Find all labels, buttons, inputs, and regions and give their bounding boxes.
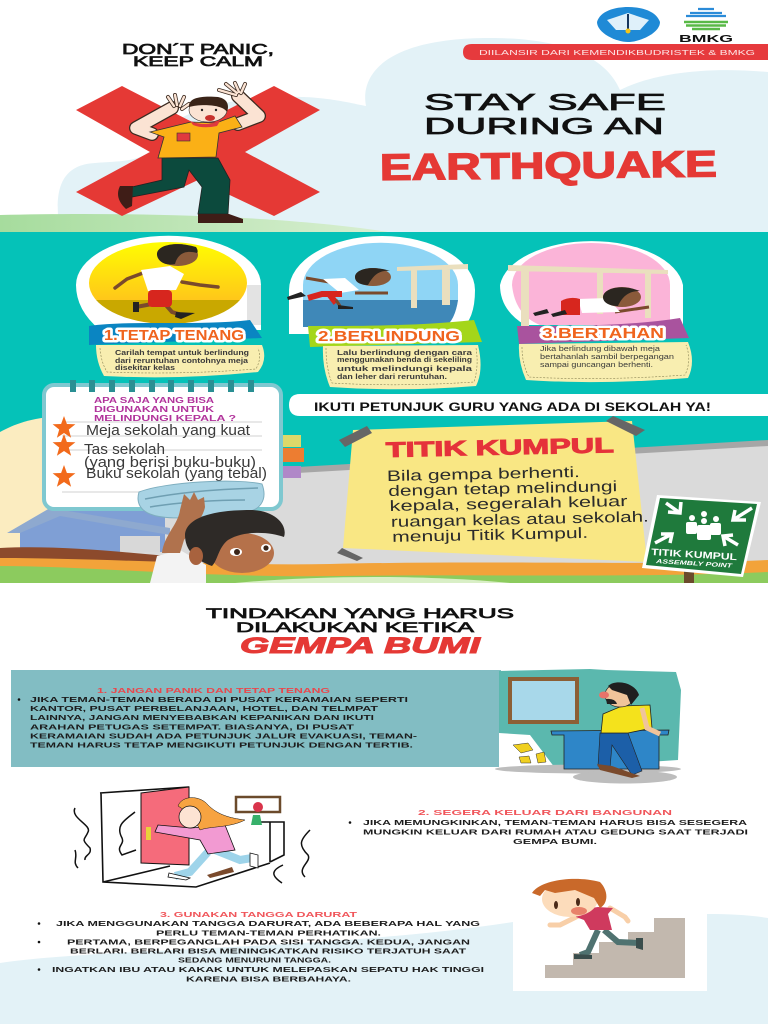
man's shoes bbox=[597, 764, 640, 778]
window bbox=[510, 679, 577, 722]
text: step 3: SEDANG MENURUNI TANGGA. bbox=[178, 958, 331, 964]
step 1: tetap tenang: dari reruntuhan contohnya meja bbox=[115, 358, 248, 365]
man's head bbox=[189, 98, 227, 122]
man's arms bbox=[136, 83, 259, 134]
arch frame 2 bbox=[289, 236, 475, 334]
panel: step 1 text: LAINNYA, JANGAN MENYEBABKAN KEPANIKAN DAN IKUTI bbox=[30, 715, 374, 722]
text: step 2: GEMPA BUMI. bbox=[513, 839, 597, 846]
heading: tindakan yang harus dilakukan ketika gempa bumi: TINDAKAN YANG HARUS bbox=[206, 605, 514, 621]
step 3: bertahan bbox=[500, 240, 692, 382]
girl's hair bbox=[178, 798, 245, 830]
pale hill at left bbox=[0, 416, 60, 560]
illustration: boy on stairs bbox=[513, 879, 707, 991]
text: step 3: KARENA BISA BERBAHAYA. bbox=[186, 976, 351, 984]
room lines bbox=[100, 787, 284, 887]
illustration: man holding cabinet bbox=[495, 669, 681, 784]
broken vase bbox=[513, 743, 546, 763]
logo: Kemendikbud bbox=[597, 7, 660, 42]
notepad: what to use to protect the head: Buku sekolah (yang tebal) bbox=[86, 466, 267, 482]
heading: don't panic: DON´T PANIC, bbox=[122, 42, 274, 58]
running boy 1 bbox=[115, 244, 218, 319]
title: stay safe during an earthquake: DURING AN bbox=[424, 113, 664, 139]
note body: kepala, segeralah keluar bbox=[389, 493, 628, 515]
note body bbox=[387, 463, 649, 546]
icon: red X bbox=[76, 86, 320, 216]
note body: menuju Titik Kumpul. bbox=[392, 525, 588, 546]
banner 3 bbox=[517, 318, 689, 344]
step 3: bertahan: Jika berlindung dibawah meja bbox=[540, 346, 660, 353]
man's shirt bbox=[601, 705, 652, 733]
step 1: tetap tenang bbox=[76, 236, 264, 377]
boy's shirt bbox=[576, 907, 613, 930]
notepad page bbox=[44, 385, 281, 509]
illustration: panicking man bbox=[118, 83, 259, 223]
girl's face bbox=[179, 806, 201, 828]
step 1: tetap tenang: Carilah tempat untuk berlindung bbox=[115, 350, 249, 357]
man's trousers bbox=[598, 733, 642, 775]
illustration: boy with backpack on head bbox=[138, 481, 285, 583]
text: step 2 bbox=[349, 810, 748, 846]
ground bands bbox=[0, 547, 190, 566]
text: step 2: MUNGKIN KELUAR DARI RUMAH ATAU GEDUNG SAAT TERJADI bbox=[363, 830, 748, 836]
step 2: berlindung: Lalu berlindung dengan cara bbox=[337, 350, 472, 357]
text: step 3: 3. GUNAKAN TANGGA DARURAT bbox=[160, 912, 358, 919]
sign: assembly point bbox=[642, 495, 761, 583]
step 3: bertahan: bertahanlah sambil berpegangan bbox=[540, 354, 674, 361]
text: step 3 bbox=[38, 912, 484, 984]
panel: step 1 text bbox=[11, 670, 501, 767]
panel: step 1 text: ARAHAN PETUGAS SETEMPAT. BIASANYA, DI PUSAT bbox=[30, 724, 355, 732]
panel: step 1 text: 1. JANGAN PANIK DAN TETAP TENANG bbox=[97, 688, 331, 695]
note body: ruangan kelas atau sekolah. bbox=[391, 509, 649, 531]
door bbox=[141, 787, 189, 865]
crawling boy 3 bbox=[533, 287, 649, 317]
sign arrows and people bbox=[655, 502, 752, 546]
illustration: girl leaving through door bbox=[74, 787, 310, 887]
note body: Bila gempa berhenti. bbox=[387, 464, 580, 485]
arch frame 1 bbox=[76, 236, 261, 330]
instruction pill bbox=[289, 394, 768, 416]
step 1: tetap tenang: disekitar kelas bbox=[115, 365, 175, 372]
backpack bbox=[138, 481, 264, 518]
boy's arms bbox=[550, 908, 628, 925]
notepad: what to use to protect the head: DIGUNAKAN UNTUK bbox=[94, 405, 214, 414]
crack lines bbox=[74, 808, 310, 883]
note 3 bbox=[519, 342, 692, 382]
scene 3 bbox=[512, 243, 670, 325]
step 2: berlindung: 2.BERLINDUNG bbox=[318, 328, 460, 345]
banner 2 bbox=[308, 320, 482, 347]
boy's head bbox=[542, 881, 598, 917]
step 2: berlindung: dan leher dari reruntuhan. bbox=[337, 374, 447, 381]
text: step 3: BERLARI. BERLARI BISA MENINGKATKAN RISIKO TERJATUH SAAT bbox=[70, 948, 467, 956]
house bbox=[7, 508, 170, 552]
step 2: berlindung: menggunakan benda di sekeliling bbox=[337, 357, 472, 364]
heading: tindakan yang harus dilakukan ketika gempa bumi: DILAKUKAN KETIKA bbox=[236, 619, 475, 635]
logo: BMKG: BMKG bbox=[679, 33, 733, 45]
crawling boy 2 bbox=[287, 268, 391, 309]
boy's body bbox=[150, 550, 206, 583]
panel: step 1 text: KANTOR, PUSAT PERBELANJAAN, HOTEL, DAN TELMPAT bbox=[30, 706, 379, 713]
banner 1 bbox=[89, 320, 262, 345]
step 2: berlindung: untuk melindungi kepala bbox=[337, 366, 472, 373]
heading: don't panic bbox=[122, 42, 274, 69]
girl's legs bbox=[175, 850, 252, 876]
boy's hair bbox=[185, 510, 285, 566]
panel: step 1 text: JIKA TEMAN-TEMAN BERADA DI PUSAT KERAMAIAN SEPERTI bbox=[30, 697, 408, 704]
text: step 2: 2. SEGERA KELUAR DARI BANGUNAN bbox=[418, 810, 672, 817]
school wall bbox=[120, 442, 768, 566]
background cloud: header bbox=[58, 38, 768, 232]
heading: don't panic: KEEP CALM bbox=[133, 54, 263, 69]
notepad side tabs bbox=[279, 435, 304, 478]
question: APA SAJA YANG BISA bbox=[94, 396, 214, 405]
text: step 3: JIKA MENGGUNAKAN TANGGA DARURAT, ADA BEBERAPA HAL YANG bbox=[56, 921, 480, 928]
background cloud: bottom bbox=[0, 914, 768, 1024]
sign: assembly point: TITIK KUMPUL bbox=[651, 547, 738, 563]
title: stay safe during an earthquake: EARTHQUAKE bbox=[380, 143, 717, 188]
rings bbox=[70, 380, 254, 392]
boy's face bbox=[210, 533, 274, 573]
panel: step 1 text: KERAMAIAN SUDAH ADA PETUNJUK JALUR EVAKUASI, TEMAN- bbox=[30, 734, 418, 740]
note 1 bbox=[96, 345, 264, 377]
man's shirt bbox=[150, 116, 242, 158]
source banner: DIILANSIR DARI KEMENDIKBUDRISTEK & BMKG bbox=[479, 48, 755, 57]
stairs bbox=[545, 918, 685, 978]
title: stay safe during an earthquake: STAY SAFE bbox=[424, 89, 666, 115]
title: stay safe during an earthquake bbox=[380, 89, 717, 188]
man's trousers bbox=[132, 158, 230, 214]
step 3: bertahan: sampai guncangan berhenti. bbox=[540, 362, 653, 369]
step 3: bertahan: 3.BERTAHAN bbox=[542, 325, 664, 342]
logo: BMKG bbox=[679, 9, 733, 45]
panel: step 1 text: TEMAN HARUS TETAP MENGIKUTI PETUNJUK DENGAN TERTIB. bbox=[30, 742, 413, 750]
step 1: tetap tenang: 1.TETAP TENANG bbox=[104, 327, 244, 344]
notepad: what to use to protect the head: MELINDUNGI KEPALA ? bbox=[94, 414, 236, 423]
picture and vase bbox=[236, 797, 280, 812]
notepad: what to use to protect the head: Tas sekolah bbox=[84, 442, 165, 458]
note body: dengan tetap melindungi bbox=[388, 478, 617, 500]
sticky note: titik kumpul bbox=[337, 416, 649, 562]
text: step 2: JIKA MEMUNGKINKAN, TEMAN-TEMAN HARUS BISA SESEGERA bbox=[363, 820, 747, 827]
arch frame 3 bbox=[500, 241, 683, 325]
heading: tindakan yang harus dilakukan ketika gempa bumi bbox=[206, 605, 514, 658]
source banner bbox=[463, 44, 768, 60]
heading: tindakan yang harus dilakukan ketika gempa bumi: GEMPA BUMI bbox=[240, 633, 481, 658]
panel: teal safety steps bbox=[0, 232, 768, 583]
table 3 bbox=[508, 265, 668, 326]
boy's legs bbox=[580, 930, 640, 955]
girl's torso bbox=[155, 825, 235, 854]
text: step 3: PERTAMA, BERPEGANGLAH PADA SISI TANGGA. KEDUA, JANGAN bbox=[67, 940, 470, 946]
note title: TITIK KUMPUL bbox=[386, 434, 614, 462]
tape bbox=[339, 426, 372, 447]
notepad: what to use to protect the head bbox=[44, 380, 281, 509]
table 2 bbox=[397, 264, 468, 308]
notepad: what to use to protect the head: (yang berisi buku-buku) bbox=[84, 455, 256, 471]
scene 1 bbox=[89, 242, 247, 323]
boy's raised arm bbox=[162, 492, 205, 553]
note 2 bbox=[323, 345, 481, 389]
list: Meja sekolah yang kuat bbox=[86, 423, 250, 439]
text: step 3: INGATKAN IBU ATAU KAKAK UNTUK MELEPASKAN SEPATU HAK TINGGI bbox=[52, 967, 484, 974]
step 2: berlindung bbox=[287, 236, 482, 389]
scene 2 bbox=[303, 243, 458, 327]
green hill bbox=[0, 214, 388, 232]
sign: assembly point: ASSEMBLY POINT bbox=[654, 559, 734, 570]
instruction pill: IKUTI PETUNJUK GURU YANG ADA DI SEKOLAH YA! bbox=[314, 402, 711, 414]
stars bbox=[53, 416, 75, 487]
man's head bbox=[605, 683, 635, 707]
text: step 3: PERLU TEMAN-TEMAN PERHATIKAN. bbox=[156, 930, 381, 938]
cabinet bbox=[551, 730, 669, 769]
man's shoes bbox=[118, 186, 243, 223]
ruled lines bbox=[62, 422, 262, 492]
